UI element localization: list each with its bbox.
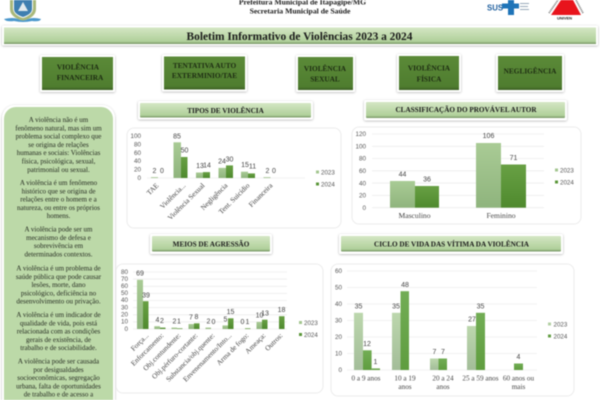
category labels: Violência Sexual [166, 182, 206, 222]
y axis and grid: 60 [121, 283, 128, 290]
value labels: 13 [196, 163, 204, 170]
value labels: 24 [218, 158, 226, 166]
y axis [130, 133, 305, 182]
y axis and grid: 30 [121, 304, 128, 311]
text block: paragraph 5: qualidade de vida, pois está [20, 319, 98, 327]
value labels: 39 [142, 292, 150, 300]
y axis and grid: 40 [359, 180, 366, 187]
value labels: 4 [156, 317, 160, 324]
value labels: 0 [241, 319, 245, 326]
logo: municipal coat of arms [4, 0, 41, 22]
value labels: 85 [173, 134, 181, 140]
value labels: 2 [153, 168, 157, 175]
logo: state triangle [549, 0, 583, 20]
text block: paragraph 2: A violência é um fenômeno [20, 179, 98, 187]
text block: paragraph 6: de trabalho e de acesso a [24, 391, 94, 399]
value labels: 14 [203, 162, 211, 170]
category labels: 25 a 59 anos [462, 374, 499, 382]
logo: SUS [487, 0, 529, 15]
y axis: 60 [134, 150, 141, 157]
category: violência sexual: SEXUAL [310, 74, 340, 83]
heading: meios de agressão [150, 234, 272, 254]
text block: paragraph 3 [24, 226, 93, 258]
value labels: 106 [483, 133, 494, 140]
category labels [352, 374, 534, 391]
text block: paragraph 3: determinados contextos. [24, 250, 93, 258]
text block: paragraph 5: trabalho e de sociabilidade. [20, 344, 97, 352]
value labels [399, 133, 517, 184]
chart: meios de agressão [116, 264, 323, 393]
value labels: 15 [241, 162, 249, 169]
category labels: Financeira [247, 181, 275, 209]
value labels: 2 [160, 318, 164, 325]
category labels: 20 a 24 [432, 374, 454, 382]
heading: classificação do provável autor [364, 100, 567, 120]
category: violência física: FÍSICA [417, 73, 442, 83]
y axis: 100 [130, 133, 141, 140]
text block: paragraph 6 [16, 358, 101, 400]
y axis and grid: 10 [335, 350, 342, 358]
text block: paragraph 1: humanas e sociais: Violências [17, 149, 101, 157]
category labels: Outros: [264, 332, 284, 353]
category labels: 10 a 19 [394, 374, 416, 382]
value labels: 7 [441, 349, 445, 356]
value labels: 7 [433, 349, 437, 356]
category labels: TAE [145, 181, 161, 197]
heading: ciclo de vida: CICLO DE VIDA DAS VÍTIMA DA VIOLÊNCIA [374, 238, 530, 248]
value labels: 5 [224, 316, 228, 324]
value labels: 2 [266, 168, 270, 175]
category labels: Substancia/obj.quente: [165, 332, 216, 384]
value labels: 0 [212, 319, 216, 326]
text block: paragraph 6: A violência pode ser causada [18, 358, 100, 366]
legend: 2024 [304, 332, 318, 339]
y axis: 80 [134, 142, 141, 148]
legend [548, 322, 568, 340]
value labels: 1 [246, 319, 250, 326]
category labels: Envenenamento/Into... [182, 332, 234, 384]
category: negligência [496, 54, 564, 92]
value labels: 0 [272, 168, 276, 175]
y axis and grid: 50 [335, 284, 342, 292]
value labels: 11 [249, 164, 256, 170]
y axis and grid: 60 [335, 268, 342, 275]
value labels: 8 [195, 314, 199, 321]
value labels: 4 [517, 354, 521, 361]
y axis and grid: 70 [121, 276, 128, 283]
chart: classificação do provável autor [352, 127, 581, 224]
category labels: Obj.contundente: [142, 332, 182, 373]
heading: meios de agressão: MEIOS DE AGRESSÃO [173, 240, 250, 248]
text block: paragraph 4: saúde pública que pode causar [16, 273, 102, 281]
category: tentativa auto extermínio: EXTERMINIO/TAE [172, 71, 237, 80]
value labels [153, 134, 276, 175]
legend: 2023 [304, 320, 318, 327]
category labels: 60 anos ou [503, 374, 534, 382]
value labels: 0 [160, 168, 164, 175]
value labels: 69 [136, 270, 144, 278]
text block: paragraph 4: psicológico, deficiência no [21, 289, 97, 297]
y axis and grid: 80 [121, 269, 128, 276]
y axis: 20 [134, 166, 141, 174]
value labels: 18 [278, 307, 285, 314]
value labels [355, 282, 521, 366]
y axis and grid: 40 [335, 301, 342, 308]
category labels: Tent. Suicídio [217, 181, 252, 216]
category: violência sexual: VIOLÊNCIA [304, 63, 347, 73]
value labels: 13 [261, 310, 269, 318]
category labels [398, 211, 516, 220]
bars 2023 [151, 142, 270, 178]
category: violência sexual [296, 55, 355, 92]
category: tentativa auto extermínio [162, 54, 247, 92]
text block: paragraph 5: A violência é um indicador de [16, 311, 101, 319]
value labels: 71 [510, 155, 517, 162]
category labels: Negligência [199, 181, 230, 212]
text block: paragraph 4: A violência é um problema de [16, 264, 101, 272]
y axis and grid: 100 [355, 144, 366, 150]
text block: paragraph 2: histórico que se origina de [22, 187, 95, 195]
category labels: Ameaça: [244, 332, 267, 355]
y axis and grid: 0 [362, 205, 366, 212]
y axis and grid: 20 [359, 192, 366, 200]
y axis and grid: 60 [359, 168, 366, 175]
text block: paragraph 1: patrimonial ou sexual. [27, 166, 90, 174]
text block: paragraph 1: fenômeno natural, mas sim um [15, 124, 102, 132]
bars 2024 [363, 291, 523, 370]
bars 2023 [137, 280, 262, 329]
chart: ciclo de vida [331, 264, 574, 396]
text block: paragraph 5: gerais de existência, de [26, 336, 91, 344]
text block: paragraph 1: A violência não é um [29, 116, 89, 124]
y axis and grid [121, 269, 287, 333]
category labels: 0 a 9 anos [352, 374, 381, 382]
value labels: 15 [227, 309, 234, 316]
legend: 2023 [560, 168, 574, 174]
y axis: 0 [137, 175, 141, 182]
logo: SUS: SUS [487, 4, 503, 12]
bars 2023 [354, 313, 476, 370]
value labels [136, 270, 285, 326]
category labels: Violência... [158, 182, 188, 211]
category labels [129, 332, 284, 384]
category labels: Feminino [486, 211, 516, 220]
text block: paragraph 5 [16, 311, 101, 352]
text block: paragraph 1: se origina de relações [28, 141, 89, 149]
y axis and grid: 40 [121, 297, 128, 304]
text block: paragraph 3: mecanismo de defesa e [26, 234, 91, 242]
heading: classificação do provável autor: CLASSIFICAÇÃO DO PROVÁVEL AUTOR [395, 104, 537, 114]
y axis and grid: 80 [359, 156, 366, 163]
category: violência financeira [40, 55, 115, 92]
heading: ciclo de vida [339, 234, 563, 254]
text block: paragraph 2 [17, 179, 100, 220]
bars 2023 [390, 143, 501, 208]
bars 2024 [415, 164, 526, 208]
y axis and grid [355, 131, 544, 212]
legend: 2023 [321, 170, 335, 176]
text block: paragraph 6: urbana, falta de oportunidades [16, 382, 101, 390]
value labels: 48 [401, 282, 409, 289]
category labels: Arma de fogo: [215, 332, 250, 367]
panel: introductory text [2, 105, 115, 400]
category: violência financeira: VIOLÊNCIA [57, 61, 100, 71]
legend [555, 168, 574, 186]
text block: paragraph 6: por desigualdades [33, 366, 84, 374]
legend [316, 170, 335, 188]
heading: tipos de violência: TIPOS DE VIOLÊNCIA [187, 105, 265, 115]
y axis and grid: 50 [121, 290, 128, 297]
category: tentativa auto extermínio: TENTATIVA AUTO [173, 61, 236, 70]
value labels: 36 [423, 177, 431, 184]
legend: 2024 [321, 182, 335, 188]
chart: tipos de violência [127, 128, 341, 228]
category labels: anos [398, 383, 412, 391]
title banner: Boletim Informativo de Violências 2023 a 2024 [187, 31, 413, 43]
value labels: 1 [177, 318, 181, 326]
y axis and grid: 120 [355, 131, 366, 138]
value labels: 30 [226, 156, 233, 164]
text block: paragraph 4 [16, 264, 102, 306]
y axis and grid: 10 [121, 319, 128, 326]
legend: 2023 [554, 322, 568, 328]
category labels: Força... [129, 332, 151, 353]
text block: paragraph 1 [15, 116, 102, 174]
value labels: 7 [189, 314, 193, 322]
category labels: Obj.pérfuro-cortante: [150, 332, 199, 381]
category: violência física: VIOLÊNCIA [408, 62, 451, 72]
text block: paragraph 1: física, psicológica, sexual, [22, 158, 96, 166]
value labels: 1 [374, 359, 378, 366]
text block: paragraph 2: homens. [47, 212, 71, 220]
legend [299, 320, 318, 339]
y axis and grid: 0 [124, 326, 128, 333]
value labels: 35 [392, 304, 400, 310]
text block: paragraph 3: A violência pode ser um [24, 226, 93, 234]
category labels [145, 181, 275, 222]
y axis and grid: 20 [121, 312, 128, 318]
header: institution names: Secretaria Municipal de Saúde [250, 6, 351, 16]
y axis and grid: 0 [338, 367, 342, 374]
text block: paragraph 5: relacionada com as condições [17, 328, 100, 336]
category: violência física [397, 54, 461, 92]
text block: paragraph 4: lesões, morte, dano [31, 281, 86, 289]
legend: 2024 [560, 180, 574, 186]
value labels: 2 [173, 318, 177, 326]
value labels: 35 [477, 304, 484, 310]
value labels: 10 [256, 312, 263, 320]
heading: tipos de violência [138, 101, 313, 120]
y axis: 40 [134, 158, 141, 165]
logo: state triangle: UNIVEN [557, 16, 572, 20]
category labels: Masculino [398, 211, 431, 220]
text block: paragraph 6: socioeconômicas, segregação [17, 374, 100, 382]
category: violência financeira: FINANCEIRA [57, 73, 104, 82]
text block: paragraph 1: problema social complexo que [16, 133, 101, 141]
value labels: 2 [207, 318, 211, 326]
value labels: 44 [399, 172, 406, 178]
value labels: 12 [363, 341, 371, 348]
bars 2024 [143, 301, 284, 329]
category: negligência: NEGLIGÊNCIA [504, 65, 557, 75]
text block: paragraph 4: desenvolvimento ou privação. [16, 298, 101, 306]
category labels: Enforcamento: [130, 332, 165, 368]
category labels: mais [512, 383, 525, 391]
category labels: anos [436, 383, 450, 391]
value labels: 27 [468, 316, 476, 324]
bars 2024 [181, 157, 255, 178]
legend: 2024 [554, 334, 568, 340]
y axis and grid: 20 [335, 334, 342, 341]
value labels: 35 [355, 304, 362, 310]
text block: paragraph 2: natureza, ou entre os próprios [17, 204, 100, 212]
y axis and grid [335, 268, 537, 374]
text block: paragraph 2: relações entre o homem e a [20, 196, 98, 204]
title banner [2, 26, 598, 46]
y axis and grid: 30 [335, 318, 342, 324]
value labels: 50 [181, 148, 188, 154]
text block: paragraph 3: sobrevivência em [34, 242, 84, 250]
header: institution names [239, 0, 366, 16]
